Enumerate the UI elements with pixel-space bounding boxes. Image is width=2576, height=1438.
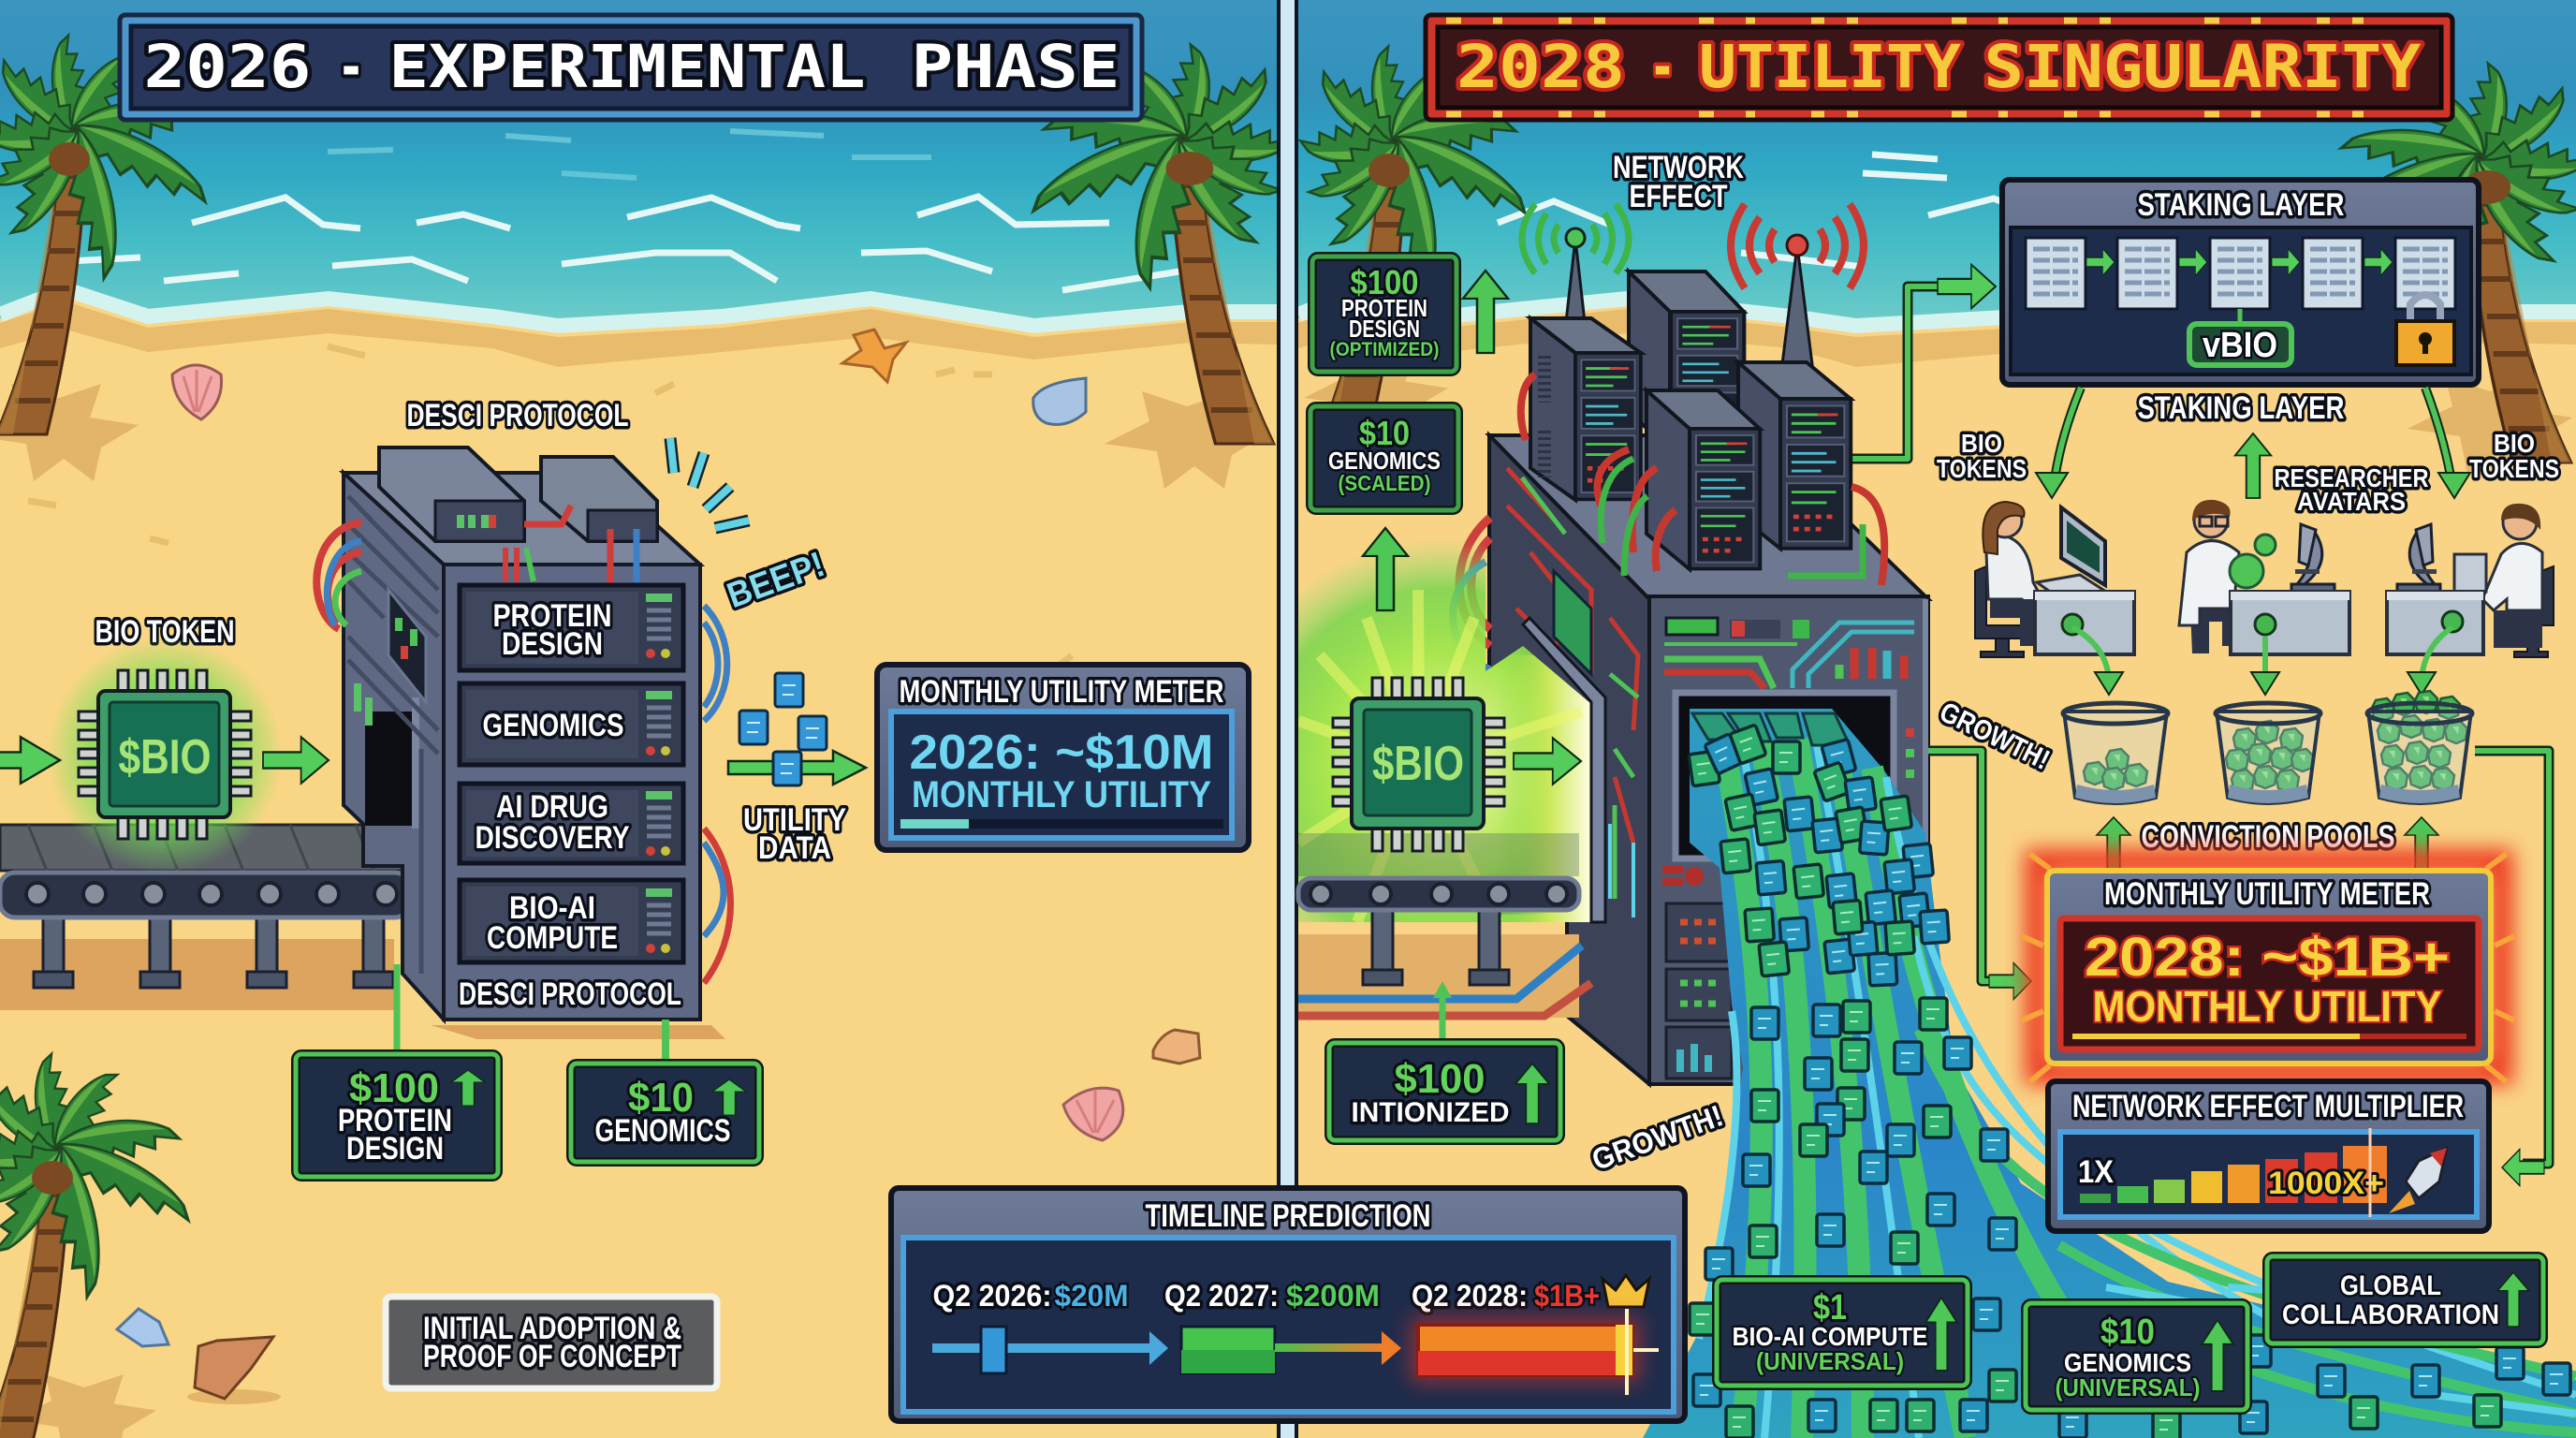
server tower: left bbox=[1530, 318, 1641, 500]
panel: network effect multiplier: NETWORK EFFECT MULTIPLIER bbox=[2072, 1089, 2464, 1124]
shell: small blue bbox=[117, 1309, 168, 1346]
icon: rocket bbox=[2389, 1148, 2447, 1213]
glow: energy burst around chip bbox=[1298, 543, 1606, 923]
label: growth upper: GROWTH! bbox=[1935, 697, 2055, 776]
value box: $10 genomics bbox=[571, 1064, 759, 1162]
pool: medium bbox=[2216, 703, 2320, 803]
panel: timeline prediction: $200M bbox=[1286, 1279, 1380, 1313]
center divider bbox=[1277, 0, 1298, 1438]
value box: $10 genomics universal: $10 bbox=[2100, 1313, 2155, 1352]
panel: 2026 monthly utility meter: MONTHLY UTILITY METER bbox=[899, 674, 1224, 710]
arrow: chip into core bbox=[1514, 738, 1581, 785]
top unit 2 bbox=[541, 457, 657, 541]
server tower: back bbox=[1629, 271, 1744, 455]
output door bbox=[1676, 693, 1894, 858]
value box: $10 genomics scaled: GENOMICS bbox=[1328, 447, 1441, 475]
panel: timeline prediction: $20M bbox=[1054, 1279, 1129, 1313]
label: bio token: BIO TOKEN bbox=[95, 614, 234, 650]
label: network effect: NETWORK bbox=[1613, 150, 1744, 185]
server tower: front bbox=[1647, 390, 1760, 569]
label: growth lower: GROWTH! bbox=[1588, 1098, 1727, 1177]
label: beep: BEEP! bbox=[723, 545, 829, 616]
palm tree: left panel top left bbox=[0, 34, 217, 434]
panel: 2028 monthly utility meter bbox=[2022, 854, 2514, 1082]
connector: machine to 2028 meter bbox=[1928, 751, 2031, 1000]
label: conviction pools: CONVICTION POOLS bbox=[2142, 819, 2394, 855]
connector: server to staking layer bbox=[1851, 265, 1996, 459]
title banner: 2026 experimental phase: - bbox=[337, 33, 365, 101]
value box: $100 intionized: $100 bbox=[1395, 1056, 1485, 1102]
shell: conch bbox=[187, 1337, 281, 1404]
value box: $1 bio-ai compute universal: BIO-AI COMPUTE bbox=[1732, 1322, 1928, 1351]
conveyor belt: left bbox=[0, 825, 412, 1010]
value box: $10 genomics scaled bbox=[1310, 406, 1458, 510]
stream: upper slanted chips inside door bbox=[1692, 713, 1850, 745]
palm shadows bbox=[0, 352, 2572, 1438]
panel: staking layer bbox=[2002, 180, 2479, 385]
arrow: meter to pool right bbox=[2405, 817, 2438, 870]
callout: initial adoption: INITIAL ADOPTION & bbox=[423, 1311, 681, 1346]
label: network effect bbox=[1613, 150, 1744, 214]
connector: pools to multiplier bbox=[2475, 751, 2549, 1185]
connector: machine to protein design value bbox=[393, 964, 401, 1054]
label: desci protocol: DESCI PROTOCOL bbox=[406, 398, 629, 433]
label: researcher avatars: RESEARCHER bbox=[2275, 463, 2428, 492]
arrow: staking to right researcher bbox=[2425, 388, 2470, 498]
server machine: desci protocol bbox=[316, 448, 730, 1039]
panel: 2028 monthly utility meter: 2028: ~$1B+ bbox=[2085, 927, 2450, 988]
top unit 1 bbox=[379, 448, 524, 541]
panel: 2026 monthly utility meter: 2026: ~$10M bbox=[910, 726, 1213, 780]
rack: ai drug discovery: DISCOVERY bbox=[476, 820, 630, 856]
value box: $100 protein design optimized: DESIGN bbox=[1349, 315, 1420, 343]
side face circuitry bbox=[1507, 468, 1638, 843]
shell: blue bbox=[1033, 378, 1086, 425]
researcher: center with microscope bbox=[2179, 500, 2349, 695]
value box: $1 bio-ai compute universal bbox=[1717, 1280, 1968, 1386]
rack: bio-ai compute: BIO-AI bbox=[509, 890, 595, 926]
value box: $100 protein design optimized: PROTEIN bbox=[1341, 294, 1427, 322]
rack: genomics: GENOMICS bbox=[483, 708, 623, 743]
title banner: 2028 utility singularity: UTILITY bbox=[1699, 33, 1961, 101]
value box: $100 protein design optimized bbox=[1312, 257, 1456, 372]
front buttons bbox=[1662, 866, 1683, 886]
server cables bbox=[1521, 374, 1884, 585]
label: bio tokens right: TOKENS bbox=[2469, 454, 2559, 483]
arrow: into chip bbox=[0, 737, 60, 784]
arrow: staking to left researcher bbox=[2036, 388, 2081, 498]
side cables bbox=[1459, 518, 1490, 646]
panel: 2028 monthly utility meter: MONTHLY UTILITY bbox=[2093, 982, 2441, 1031]
researcher: left with computer bbox=[1975, 502, 2134, 695]
label: network effect: EFFECT bbox=[1629, 179, 1728, 214]
pool: high bbox=[2367, 691, 2472, 803]
icon: crown bbox=[1603, 1275, 1649, 1307]
value box: $10 genomics universal bbox=[2026, 1303, 2247, 1410]
value box: $10 genomics scaled: (SCALED) bbox=[1339, 471, 1430, 495]
arrow: utility data to meter bbox=[728, 751, 866, 785]
arrow: lower value up bbox=[1363, 528, 1408, 610]
label: bio tokens left: BIO bbox=[1961, 429, 2002, 458]
value box: global collaboration: COLLABORATION bbox=[2282, 1299, 2499, 1330]
panel: timeline prediction: $1B+ bbox=[1534, 1279, 1600, 1313]
cables left bbox=[316, 522, 361, 629]
rack: protein design: DESIGN bbox=[502, 626, 603, 662]
shell: pink lower bbox=[1063, 1088, 1123, 1140]
panel: 2026 monthly utility meter: MONTHLY UTILITY bbox=[912, 774, 1211, 815]
arrow: meter to pool left bbox=[2097, 817, 2130, 870]
panel: timeline prediction: TIMELINE PREDICTION bbox=[1146, 1198, 1430, 1234]
rack: protein design bbox=[460, 585, 683, 670]
label: bio tokens right: BIO bbox=[2494, 429, 2535, 458]
value box: $100 protein design: DESIGN bbox=[346, 1131, 444, 1167]
chip: bio token: $BIO bbox=[118, 730, 212, 785]
label: bio tokens left: TOKENS bbox=[1937, 454, 2027, 483]
server machine: network core bbox=[1453, 435, 1928, 1084]
title banner: 2026 experimental phase: PHASE bbox=[912, 33, 1120, 101]
label: researcher avatars bbox=[2275, 463, 2428, 516]
antenna: green bbox=[1522, 204, 1629, 339]
panel: 2026 monthly utility meter bbox=[877, 665, 1249, 850]
background: right beach panel bbox=[1298, 0, 2576, 1438]
value box: $100 protein design bbox=[296, 1054, 498, 1177]
value box: $100 protein design optimized: (OPTIMIZED) bbox=[1329, 339, 1440, 360]
value box: global collaboration: GLOBAL bbox=[2340, 1270, 2441, 1301]
palm tree: right panel left bbox=[1299, 45, 1537, 446]
value box: $10 genomics universal: (UNIVERSAL) bbox=[2056, 1373, 2200, 1401]
arrow: researchers up to staking bbox=[2235, 433, 2271, 498]
callout: initial adoption: PROOF OF CONCEPT bbox=[423, 1339, 681, 1374]
panel: network effect multiplier: 1X bbox=[2078, 1154, 2114, 1190]
rack: genomics bbox=[460, 683, 683, 765]
value box: $10 genomics scaled: $10 bbox=[1359, 414, 1410, 452]
palm tree: left panel top right bbox=[1020, 43, 1293, 444]
antenna: red bbox=[1731, 204, 1864, 379]
label: utility data: DATA bbox=[758, 830, 831, 866]
beep signal lines bbox=[670, 438, 749, 528]
pool: low bbox=[2063, 703, 2168, 803]
panel: network effect multiplier bbox=[2048, 1081, 2489, 1231]
front controls bbox=[1666, 618, 1718, 635]
rack: ai drug discovery bbox=[460, 784, 683, 863]
conveyor belt: right bbox=[1298, 833, 1591, 1018]
panel: timeline prediction: Q2 2028: bbox=[1412, 1279, 1528, 1313]
value box: $100 intionized bbox=[1329, 1043, 1560, 1140]
rack: bio-ai compute bbox=[460, 880, 683, 962]
icon: starfish bbox=[842, 330, 906, 382]
label: utility data: UTILITY bbox=[743, 802, 846, 838]
value box: $10 genomics: $10 bbox=[628, 1075, 694, 1121]
panel: staking layer: vBIO bbox=[2203, 326, 2277, 365]
label: utility data bbox=[743, 802, 846, 866]
machine label: DESCI PROTOCOL bbox=[459, 976, 681, 1012]
icons: utility data blocks bbox=[739, 673, 827, 750]
door indicator lights bbox=[1906, 728, 1914, 737]
label: staking layer lower: STAKING LAYER bbox=[2138, 390, 2344, 426]
connector: conveyor to intionized value bbox=[1433, 981, 1452, 1043]
value box: $100 protein design: $100 bbox=[349, 1065, 439, 1111]
title banner: 2028 utility singularity bbox=[1426, 15, 2452, 120]
value box: $10 genomics: GENOMICS bbox=[595, 1113, 730, 1149]
value box: $1 bio-ai compute universal: $1 bbox=[1813, 1288, 1847, 1328]
bar: 2026 bbox=[932, 1327, 1168, 1373]
title banner: 2026 experimental phase: 2026 bbox=[144, 33, 311, 101]
rack: bio-ai compute: COMPUTE bbox=[487, 920, 618, 956]
researcher: right with microscope bbox=[2387, 504, 2554, 695]
title banner: 2026 experimental phase: EXPERIMENTAL bbox=[389, 33, 865, 101]
chip: $bio overcharged: $BIO bbox=[1372, 737, 1464, 791]
panel: timeline prediction: Q2 2027: bbox=[1164, 1279, 1279, 1313]
label: bio tokens right bbox=[2469, 429, 2559, 483]
panel: staking layer: STAKING LAYER bbox=[2138, 187, 2344, 223]
label: researcher avatars: AVATARS bbox=[2297, 487, 2406, 516]
rack: ai drug discovery: AI DRUG bbox=[496, 789, 608, 825]
title banner: 2026 experimental phase bbox=[120, 15, 1142, 120]
arrow: chip to machine bbox=[263, 737, 329, 784]
shell: pink bbox=[172, 365, 222, 419]
callout: initial adoption bbox=[386, 1297, 717, 1388]
background: left beach panel bbox=[0, 0, 1279, 1438]
palm tree: right panel right bbox=[2318, 62, 2576, 462]
panel: network effect multiplier: 1000X+ bbox=[2268, 1166, 2384, 1201]
label: bio tokens left bbox=[1937, 429, 2027, 483]
palm tree: left panel bottom bbox=[0, 1052, 200, 1438]
data stream waterfall bbox=[1643, 709, 2576, 1438]
value box: $100 protein design optimized: $100 bbox=[1350, 263, 1419, 301]
panel: timeline prediction: Q2 2026: bbox=[932, 1279, 1052, 1313]
chip: $bio overcharged bbox=[1333, 678, 1504, 851]
value box: $100 protein design: PROTEIN bbox=[338, 1103, 452, 1138]
title banner: 2028 utility singularity: SINGULARITY bbox=[1984, 33, 2422, 101]
arrow: upper value up bbox=[1463, 271, 1508, 353]
chip: bio token bbox=[47, 637, 283, 873]
value box: $100 intionized: INTIONIZED bbox=[1352, 1097, 1509, 1128]
panel: 2028 monthly utility meter: MONTHLY UTILITY METER bbox=[2104, 876, 2430, 912]
value box: global collaboration bbox=[2267, 1256, 2543, 1343]
cables right bbox=[704, 606, 727, 721]
panel: timeline prediction bbox=[891, 1188, 1685, 1421]
value box: $1 bio-ai compute universal: (UNIVERSAL) bbox=[1756, 1347, 1904, 1375]
title banner: 2028 utility singularity: 2028 bbox=[1456, 33, 1625, 101]
server tower: right bbox=[1738, 362, 1851, 549]
vents bbox=[1666, 903, 1732, 961]
bar: 2028 bbox=[1411, 1309, 1659, 1395]
rack: protein design: PROTEIN bbox=[492, 598, 612, 634]
connector: machine to genomics value bbox=[662, 1020, 669, 1064]
bar: 2027 bbox=[1181, 1327, 1401, 1373]
title banner: 2028 utility singularity: - bbox=[1649, 33, 1676, 101]
value box: $10 genomics universal: GENOMICS bbox=[2064, 1348, 2191, 1377]
shell: tan bbox=[1153, 1030, 1200, 1064]
